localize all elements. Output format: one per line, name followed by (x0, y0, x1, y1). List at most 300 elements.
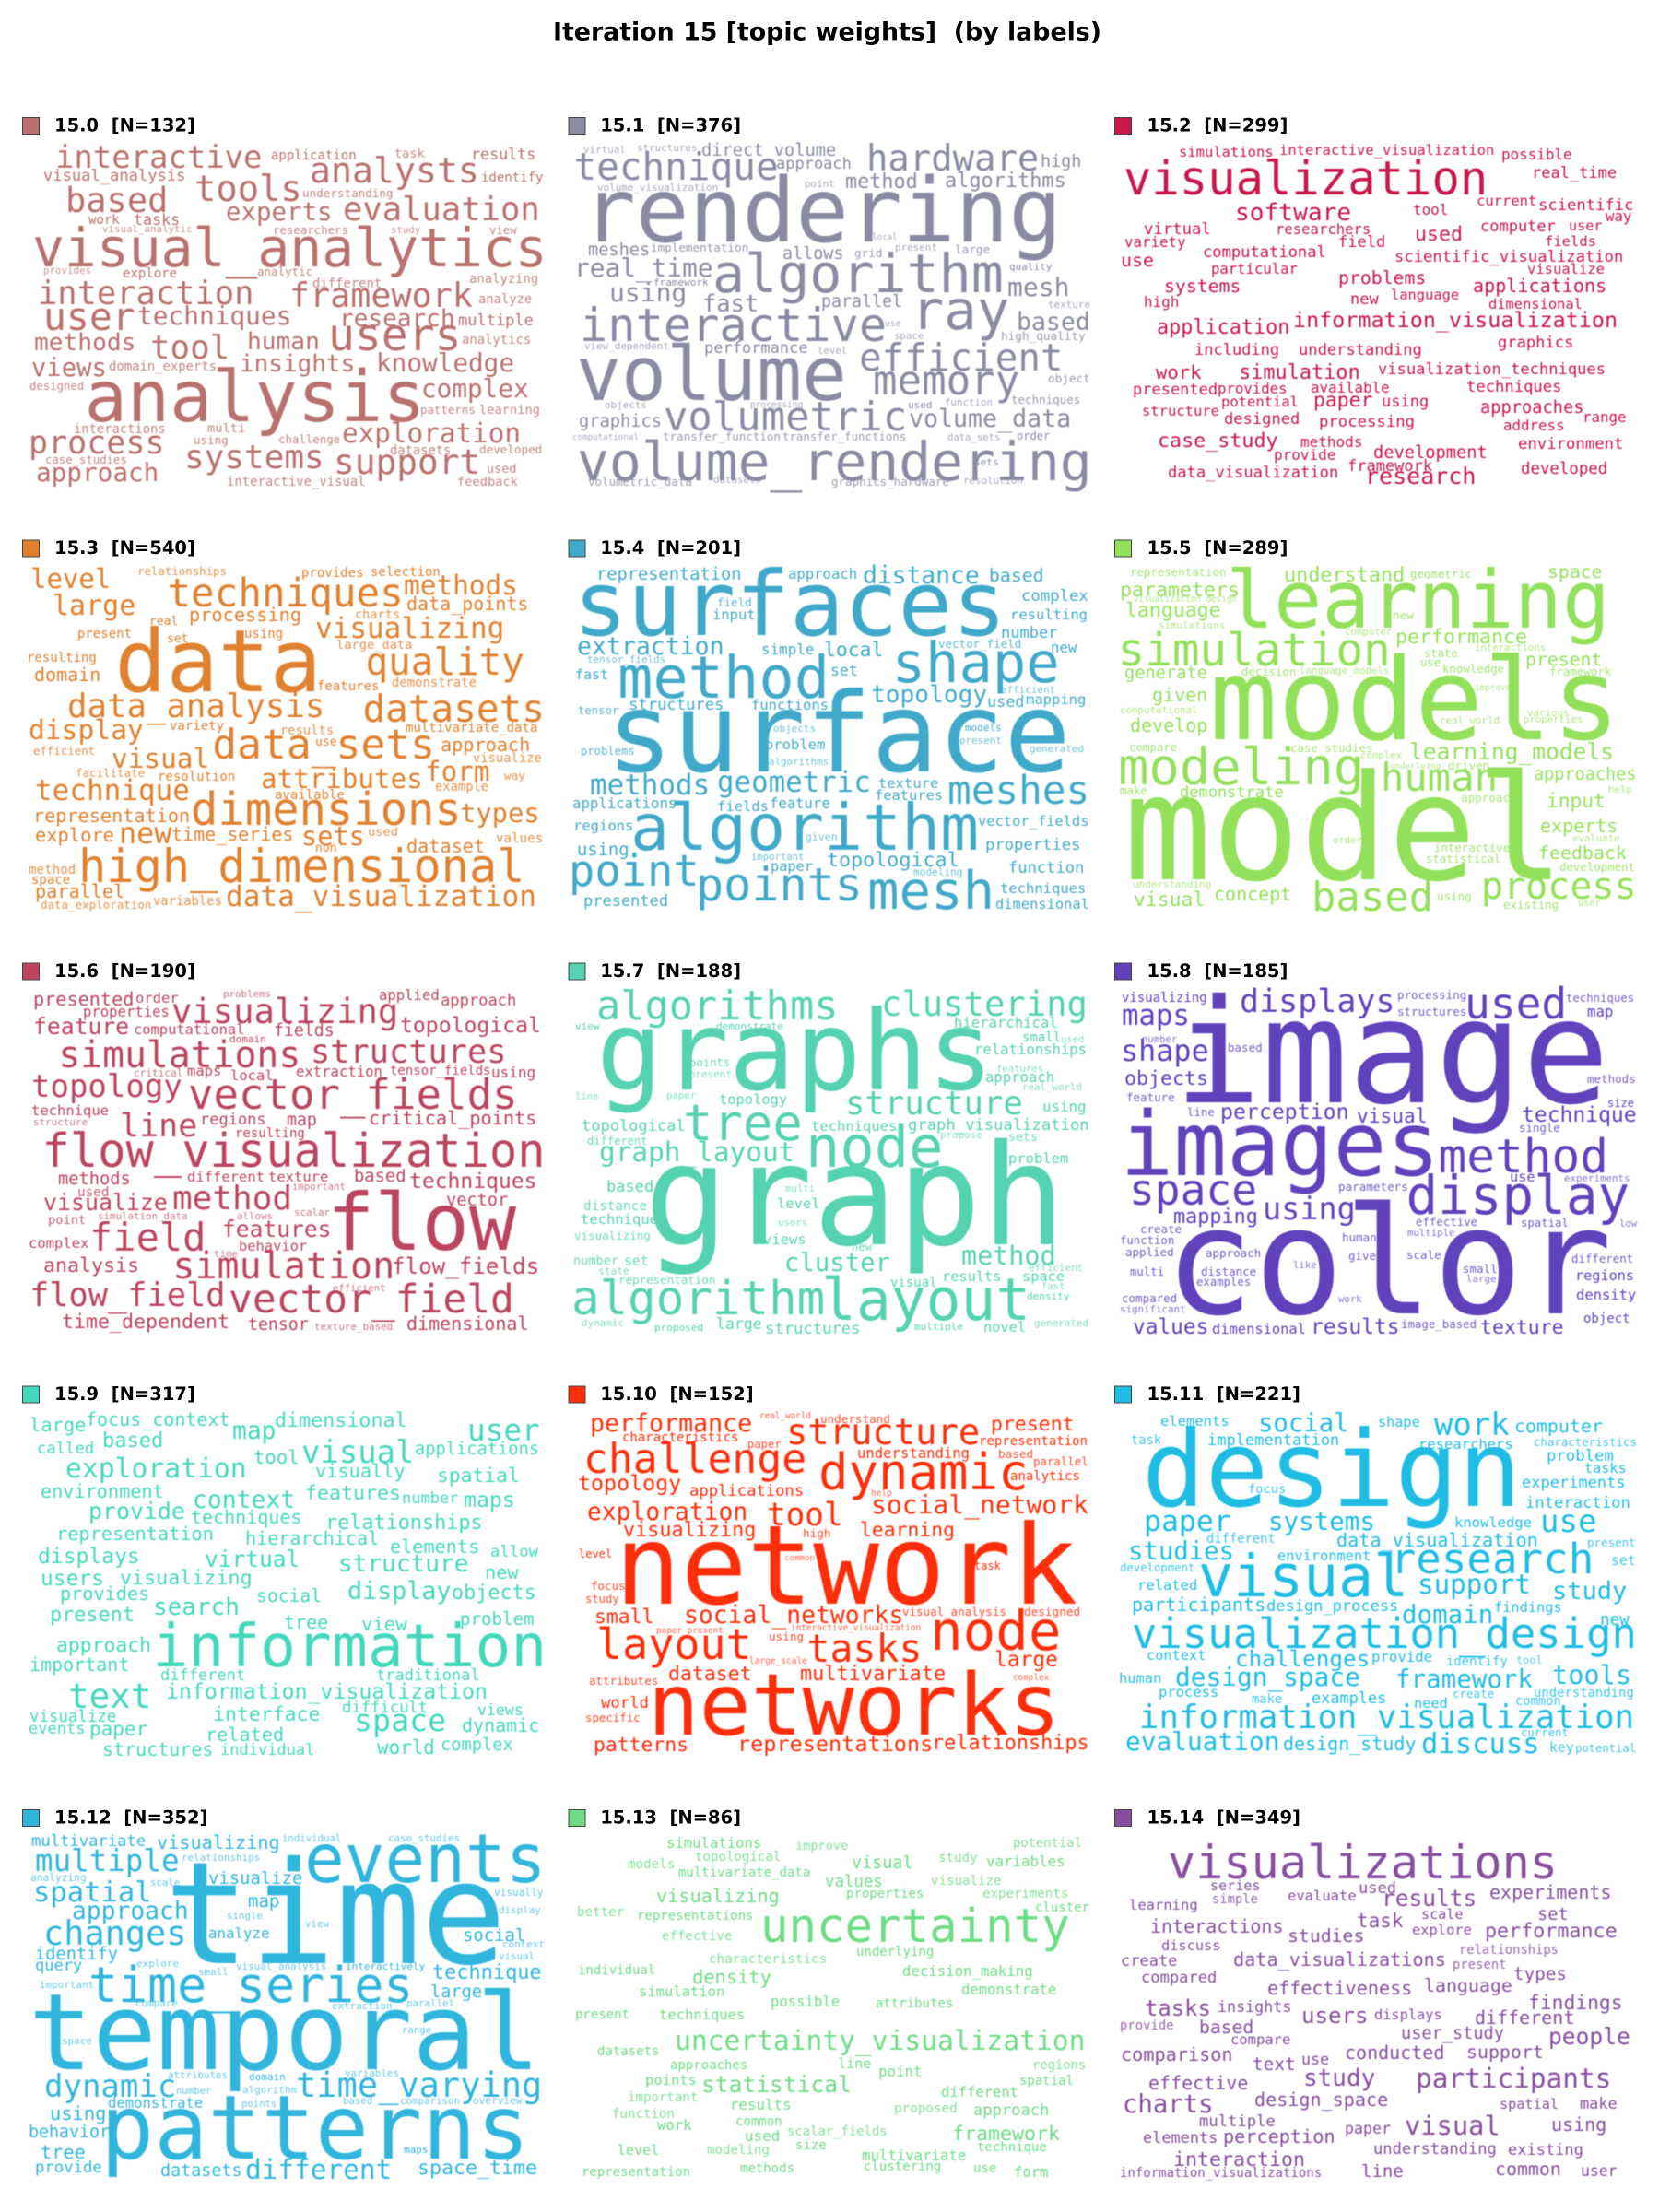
word cloud 15.6: flow_field (29, 1277, 226, 1314)
swatch 15.3 (22, 540, 39, 557)
word cloud 15.4: shape (892, 631, 1060, 696)
word cloud 15.12: behavior (29, 2123, 110, 2142)
word cloud 15.0: exploration (342, 418, 521, 449)
word cloud 15.9: dimensional (275, 1409, 407, 1432)
word cloud 15.14: using (1551, 2113, 1606, 2136)
word cloud 15.1: volume_rendering (577, 430, 1092, 493)
word cloud 15.12: relationships (182, 1852, 260, 1864)
word cloud 15.7: graph_layout (599, 1136, 794, 1169)
word cloud 15.10: performance (590, 1409, 752, 1438)
word cloud 15.13: techniques (659, 2006, 745, 2023)
word cloud 15.7: sets (1008, 1131, 1038, 1145)
word cloud 15.14: line (1361, 2161, 1404, 2182)
word cloud 15.6: visualizing (171, 991, 398, 1031)
word cloud 15.10: networks (648, 1655, 1061, 1755)
word cloud 15.6: techniques (409, 1170, 536, 1194)
word cloud 15.12: visually (494, 1887, 544, 1899)
word cloud 15.8: method (1438, 1130, 1608, 1184)
word cloud 15.2: range (1583, 408, 1627, 426)
word cloud 15.8: number (1142, 1034, 1177, 1045)
word cloud 15.12: using (50, 2102, 106, 2124)
word cloud 15.9: different (160, 1666, 245, 1685)
word cloud 15.11: create (1453, 1687, 1494, 1700)
word cloud 15.14: conducted (1345, 2041, 1444, 2064)
word cloud 15.5: performance (1395, 626, 1527, 649)
word cloud 15.8: approach (1206, 1246, 1261, 1260)
word cloud 15.4: present (959, 735, 1002, 747)
heading 15.6: 15.6 [N=190] (54, 960, 195, 982)
word cloud 15.7: new (852, 1241, 873, 1253)
word cloud 15.13: points (645, 2072, 697, 2088)
word cloud 15.10: present (991, 1413, 1075, 1436)
word cloud 15.9: complex (441, 1735, 513, 1755)
word cloud 15.2: address (1503, 417, 1565, 434)
panel: 15.4 (569, 537, 1089, 922)
word cloud 15.11: systems (1268, 1507, 1375, 1536)
word cloud 15.5 (1118, 555, 1637, 921)
word cloud 15.2: development (1373, 443, 1488, 463)
word cloud 15.7: users (778, 1217, 807, 1229)
word cloud 15.14: present (1453, 1958, 1507, 1972)
word cloud 15.3: approach (441, 734, 530, 756)
word cloud 15.5: help (1608, 783, 1632, 795)
word cloud 15.14: use (1301, 2050, 1329, 2068)
word cloud 15.9: visually (315, 1460, 406, 1482)
word cloud 15.12: spatial (33, 1877, 152, 1909)
word cloud 15.5: new (1393, 608, 1414, 622)
word cloud 15.1: resolution (963, 475, 1023, 487)
swatch 15.14 (1115, 1810, 1132, 1827)
word cloud 15.10: large_scale (749, 1656, 807, 1666)
word cloud 15.13: framework (952, 2123, 1060, 2146)
word cloud 15.4: field (717, 595, 752, 609)
word cloud 15.0: understanding (302, 186, 394, 200)
word cloud 15.14: visual (1405, 2110, 1500, 2141)
word cloud 15.3: large_data (336, 638, 412, 653)
word cloud 15.12: technique (432, 1961, 542, 1984)
word cloud 15.3: resulting (27, 651, 97, 665)
word cloud 15.14: task (1357, 1910, 1404, 1932)
word cloud 15.7: using (1042, 1098, 1087, 1115)
word cloud 15.10: characteristics (622, 1430, 738, 1445)
word cloud 15.7: techniques (811, 1118, 897, 1135)
word cloud 15.14: discuss (1161, 1937, 1220, 1954)
swatch 15.1 (569, 118, 585, 135)
word cloud 15.13: common (735, 2114, 782, 2129)
word cloud 15.0: feedback (457, 475, 519, 489)
word cloud 15.11: framework (1395, 1665, 1533, 1694)
word cloud 15.4: function (1008, 859, 1084, 877)
word cloud 15.2: applications (1473, 275, 1606, 297)
word cloud 15.14: evaluate (1288, 1888, 1357, 1904)
word cloud 15.8: texture (1480, 1316, 1564, 1339)
word cloud 15.13: representations (637, 1909, 753, 1924)
word cloud 15.6: dimensional (406, 1312, 528, 1335)
word cloud 15.9: visualize (29, 1708, 116, 1726)
word cloud 15.1: processing (750, 400, 803, 410)
word cloud 15.14: interactions (1150, 1915, 1283, 1937)
word cloud 15.9: context (193, 1486, 295, 1514)
word cloud 15.10: understand (820, 1412, 890, 1426)
word cloud 15.6: vector (446, 1191, 508, 1210)
swatch 15.7 (569, 963, 585, 980)
heading 15.8: 15.8 [N=185] (1147, 960, 1288, 982)
word cloud 15.6: based (354, 1167, 406, 1186)
word cloud 15.9: social (256, 1585, 322, 1606)
word cloud 15.10: complex (1013, 1673, 1050, 1683)
word cloud 15.0: research (339, 305, 455, 333)
word cloud 15.3: visualize (473, 751, 542, 766)
word cloud 15.12: range (402, 2024, 431, 2036)
word cloud 15.5: make (1120, 783, 1147, 797)
word cloud 15.8: spatial (1521, 1217, 1569, 1230)
word cloud 15.0: work (88, 213, 120, 228)
word cloud 15.14: based (1199, 2017, 1253, 2038)
word cloud 15.6: using (491, 1064, 535, 1081)
word cloud 15.8 (1120, 969, 1638, 1349)
word cloud 15.1: volumetric (664, 394, 907, 441)
word cloud 15.1: data_sets (947, 432, 1000, 443)
word cloud 15.9: techniques (191, 1506, 301, 1528)
word cloud 15.9: elements (390, 1535, 479, 1558)
word cloud 15.9: views (477, 1701, 524, 1719)
word cloud 15.14: data_visualizations (1233, 1948, 1446, 1971)
word cloud 15.4: tensor_fields (587, 653, 665, 665)
word cloud 15.6: extraction (296, 1064, 382, 1080)
word cloud 15.7: used (1061, 1034, 1084, 1045)
word cloud 15.8: image (1174, 969, 1609, 1137)
word cloud 15.11: computer (1514, 1416, 1603, 1437)
word cloud 15.7: hierarchical (954, 1015, 1058, 1031)
word cloud 15.4: fast (575, 666, 608, 683)
word cloud 15.11: environment (1277, 1547, 1371, 1564)
word cloud 15.8: mapping (1173, 1206, 1258, 1229)
word cloud 15.8: density (1576, 1287, 1636, 1303)
word cloud 15.8: multi (1130, 1265, 1164, 1278)
word cloud 15.0: support (334, 441, 480, 482)
word cloud 15.7: topology (719, 1091, 787, 1108)
panel: 15.5 (1115, 537, 1637, 921)
word cloud 15.12: multiple (35, 1843, 180, 1878)
word cloud 15.0: approach (36, 457, 159, 488)
word cloud 15.14: results (1382, 1885, 1477, 1912)
word cloud 15.5: given (1152, 684, 1207, 706)
word cloud 15.6: texture_based (314, 1321, 393, 1333)
word cloud 15.12: large (430, 1983, 482, 2002)
word cloud 15.1: present (895, 241, 937, 253)
heading 15.0: 15.0 [N=132] (54, 115, 195, 136)
word cloud 15.3: set (167, 632, 188, 646)
word cloud 15.6: field (89, 1215, 206, 1260)
word cloud 15.1: use (885, 319, 900, 329)
word cloud 15.5: present (1525, 649, 1602, 670)
word cloud 15.5: visualization_design (1134, 594, 1237, 605)
word cloud 15.13: multivariate (862, 2147, 966, 2164)
word cloud 15.10: large (994, 1648, 1058, 1672)
word cloud 15.5: underlying (1390, 761, 1441, 771)
word cloud 15.3: facilitate (76, 766, 145, 780)
word cloud 15.13: possible (771, 1994, 840, 2010)
word cloud 15.4: meshes (947, 768, 1089, 814)
word cloud 15.14: compare (1230, 2031, 1290, 2048)
word cloud 15.9: applications (415, 1440, 539, 1459)
word cloud 15.0: tool (150, 329, 229, 367)
word cloud 15.12: identify (35, 1945, 118, 1964)
word cloud 15.13: level (618, 2142, 659, 2159)
word cloud 15.0: evaluation (343, 191, 540, 229)
word cloud 15.9: provides (60, 1583, 149, 1605)
word cloud 15.4: vector_field (938, 637, 1021, 651)
word cloud 15.7: present (689, 1068, 732, 1080)
word cloud 15.3: quality (365, 640, 524, 684)
word cloud 15.5: compare (1129, 740, 1177, 754)
word cloud 15.4: modeling (913, 866, 962, 878)
word cloud 15.3: features (317, 679, 379, 694)
word cloud 15.11: social (1258, 1409, 1349, 1438)
word cloud 15.2: graphics (1498, 334, 1573, 352)
word cloud 15.10: analytics (1010, 1469, 1080, 1484)
word cloud 15.2: software (1235, 199, 1351, 227)
word cloud 15.5: approaches (1534, 765, 1636, 784)
word cloud 15.13: simulation (639, 1983, 724, 2000)
word cloud 15.12: analyzing (30, 1872, 87, 1884)
word cloud 15.0: insights (240, 350, 355, 378)
word cloud 15.13: visualize (931, 1874, 1001, 1888)
word cloud 15.11: use (1540, 1503, 1596, 1540)
word cloud 15.12: single (227, 1910, 263, 1922)
word cloud 15.13: density (692, 1966, 771, 1988)
word cloud 15.7: graphs (596, 988, 994, 1116)
word cloud 15.14: information_visualizations (1120, 2166, 1322, 2181)
word cloud 15.2: researchers (1276, 221, 1371, 238)
word cloud 15.7: distance (583, 1199, 647, 1214)
word cloud 15.3: charts (355, 607, 400, 622)
swatch 15.5 (1115, 540, 1132, 557)
word cloud 15.4 (569, 552, 1089, 922)
word cloud 15.3: method (29, 863, 76, 877)
word cloud 15.14: create (1121, 1952, 1177, 1971)
word cloud 15.2: designed (1224, 410, 1300, 429)
word cloud 15.10: high (803, 1526, 831, 1540)
word cloud 15.7: representation (618, 1273, 715, 1287)
word cloud 15.3: available (275, 788, 345, 803)
word cloud 15.5: geometric (1410, 567, 1472, 581)
word cloud 15.5: existing (1503, 898, 1559, 912)
word cloud 15.6: vector_fields (188, 1070, 518, 1119)
word cloud 15.10: help (871, 1488, 892, 1499)
word cloud 15.4: problem (765, 736, 825, 753)
word cloud 15.5: demonstrate (1180, 783, 1284, 802)
word cloud 15.12: map (248, 1891, 279, 1912)
word cloud 15.5: user (1578, 898, 1601, 909)
word cloud 15.3: display (29, 714, 144, 746)
word cloud 15.7: multi (785, 1182, 815, 1194)
panel: 15.14 (1115, 1807, 1630, 2182)
word cloud 15.2: particular (1211, 261, 1298, 277)
word cloud 15.11: key (1549, 1740, 1574, 1756)
word cloud 15.10: relationships (932, 1732, 1089, 1755)
word cloud 15.3: data_visualization (226, 880, 536, 913)
word cloud 15.1: based (1017, 308, 1090, 336)
word cloud 15.11: tool (1516, 1653, 1543, 1666)
word cloud 15.0: learning (479, 403, 540, 418)
word cloud 15.4: dimensional (995, 896, 1089, 912)
word cloud 15.7: relationships (974, 1041, 1087, 1058)
word cloud 15.11: research (1391, 1534, 1594, 1583)
word cloud 15.8: examples (1196, 1276, 1251, 1288)
panel: 15.2 (1115, 115, 1633, 489)
word cloud 15.14: language (1424, 1975, 1512, 1996)
swatch 15.11 (1115, 1386, 1132, 1403)
word cloud 15.9: allow (490, 1543, 539, 1561)
word cloud 15.4: point (569, 846, 700, 897)
word cloud 15.10: understanding (857, 1445, 970, 1462)
word cloud 15.9: search (153, 1594, 240, 1621)
word cloud 15.10: layout (596, 1620, 752, 1670)
word cloud 15.2: research (1365, 463, 1476, 489)
word cloud 15.12: scale (150, 1877, 180, 1888)
word cloud 15.2: scientific (1538, 196, 1633, 215)
word cloud 15.3: techniques (167, 571, 404, 617)
word cloud 15.11: information_visualization (1139, 1699, 1634, 1736)
word cloud 15.1: graphics (579, 412, 662, 431)
panel: 15.9 (22, 1383, 547, 1760)
heading 15.10: 15.10 [N=152] (600, 1383, 754, 1405)
word cloud 15.4: structures (629, 696, 724, 714)
word cloud 15.4: algorithms (769, 756, 829, 768)
word cloud 15.14: interaction (1173, 2148, 1305, 2171)
word cloud 15.11: examples (1312, 1688, 1386, 1707)
word cloud 15.7: graph_visualization (908, 1116, 1089, 1135)
word cloud 15.11: evaluation (1125, 1726, 1279, 1757)
word cloud 15.4: problems (581, 745, 635, 758)
word cloud 15.1: high_quality (1001, 329, 1086, 343)
word cloud 15.3: dataset (406, 835, 485, 857)
word cloud 15.2: using (1382, 393, 1429, 411)
word cloud 15.5: using (1437, 889, 1472, 903)
word cloud 15.6: behavior (239, 1238, 307, 1254)
word cloud 15.5: computational (1120, 704, 1198, 716)
word cloud 15.6: presented (33, 988, 134, 1010)
word cloud 15.10: representations (737, 1731, 933, 1757)
word cloud 15.10: based (998, 1447, 1033, 1461)
word cloud 15.13: important (628, 2090, 698, 2105)
word cloud 15.2: developed (1521, 460, 1607, 478)
word cloud 15.5: representation (1130, 565, 1226, 579)
word cloud 15.1: performance (704, 339, 808, 358)
word cloud 15.4: important (751, 852, 804, 863)
word cloud 15.3: values (496, 831, 543, 846)
word cloud 15.13: approaches (670, 2058, 747, 2073)
word cloud 15.2: techniques (1466, 378, 1561, 396)
word cloud 15.14: explore (1412, 1922, 1472, 1938)
word cloud 15.13: line (838, 2055, 872, 2072)
word cloud 15.4: presented (583, 892, 668, 911)
word cloud 15.2: including (1194, 341, 1279, 359)
word cloud 15.6: fields (274, 1021, 335, 1041)
word cloud 15.8: function (1120, 1234, 1174, 1247)
word cloud 15.14: elements (1143, 2128, 1218, 2147)
word cloud 15.1 (572, 138, 1092, 493)
word cloud 15.8: structures (1397, 1005, 1466, 1018)
word cloud 15.10: learning (860, 1519, 955, 1542)
word cloud 15.6: vector_field (229, 1277, 514, 1323)
word cloud 15.9: relationships (325, 1512, 483, 1535)
word cloud 15.4: fields (717, 798, 769, 815)
word cloud 15.11 (1119, 1406, 1637, 1760)
word cloud 15.3: time_series (171, 823, 293, 845)
word cloud 15.7: algorithm (571, 1271, 825, 1325)
word cloud 15.9: number (402, 1489, 458, 1508)
word cloud 15.8: large (1466, 1273, 1497, 1285)
word cloud 15.10: common (784, 1554, 815, 1563)
word cloud 15.14: common (1495, 2159, 1561, 2180)
word cloud 15.0: using (194, 433, 229, 447)
word cloud 15.13: clustering (864, 2159, 941, 2174)
heading 15.5: 15.5 [N=289] (1147, 537, 1288, 559)
word cloud 15.10: visual_analysis (902, 1605, 1006, 1618)
word cloud 15.12: compare (135, 1997, 178, 2009)
word cloud 15.8: used (1465, 979, 1567, 1029)
word cloud 15.0: experts (226, 198, 332, 227)
word cloud 15.4: surfaces (573, 552, 1006, 657)
swatch 15.4 (569, 540, 585, 557)
word cloud 15.14: understanding (1373, 2140, 1497, 2159)
word cloud 15.12: multivariate (31, 1832, 146, 1851)
word cloud 15.1: allows (782, 244, 843, 264)
word cloud 15.9: important (29, 1653, 129, 1676)
word cloud 15.7: propose (940, 1129, 982, 1141)
word cloud 15.11: study (1552, 1577, 1627, 1606)
word cloud 15.10: task (974, 1559, 1002, 1572)
word cloud 15.11: experiments (1522, 1474, 1626, 1492)
word cloud 15.1: volume (576, 331, 847, 418)
word cloud 15.10: attributes (589, 1674, 658, 1688)
word cloud 15.8: shape (1121, 1034, 1209, 1068)
word cloud 15.6: features (222, 1216, 331, 1242)
word cloud 15.13 (575, 1835, 1089, 2181)
heading 15.1: 15.1 [N=376] (600, 115, 741, 136)
word cloud 15.12: context (502, 1938, 545, 1950)
word cloud 15.9: paper (89, 1718, 147, 1740)
word cloud 15.8: significant (1120, 1303, 1186, 1315)
word cloud 15.14: scale (1421, 1906, 1463, 1923)
word cloud 15.5: decision (1241, 665, 1296, 678)
word cloud 15.9: maps (464, 1488, 515, 1512)
word cloud 15.3: processing (189, 604, 301, 626)
word cloud 15.6: allows (237, 1210, 273, 1222)
word cloud 15.8: given (1348, 1249, 1383, 1263)
word cloud 15.8: object (1583, 1312, 1630, 1326)
word cloud 15.10: exploration (587, 1499, 747, 1526)
swatch 15.2 (1115, 118, 1132, 135)
word cloud 15.11: identify (1446, 1654, 1508, 1669)
word cloud 15.4: points (696, 857, 863, 912)
word cloud 15.5: simulations (1159, 619, 1225, 631)
word cloud 15.5: parameters (1120, 579, 1240, 602)
word cloud 15.10: level (579, 1547, 612, 1560)
word cloud 15.9: new (485, 1561, 519, 1583)
word cloud 15.11: design (1142, 1408, 1522, 1531)
word cloud 15.11: interaction (1525, 1494, 1630, 1512)
word cloud 15.5: improve (1475, 683, 1512, 693)
word cloud 15.3: visualizing (315, 612, 504, 645)
word cloud 15.2: provide (1274, 446, 1335, 464)
word cloud 15.13: experiments (982, 1887, 1068, 1901)
word cloud 15.2: environment (1518, 435, 1623, 453)
heading 15.4: 15.4 [N=201] (600, 537, 741, 559)
word cloud 15.7: fast (1041, 1281, 1065, 1292)
